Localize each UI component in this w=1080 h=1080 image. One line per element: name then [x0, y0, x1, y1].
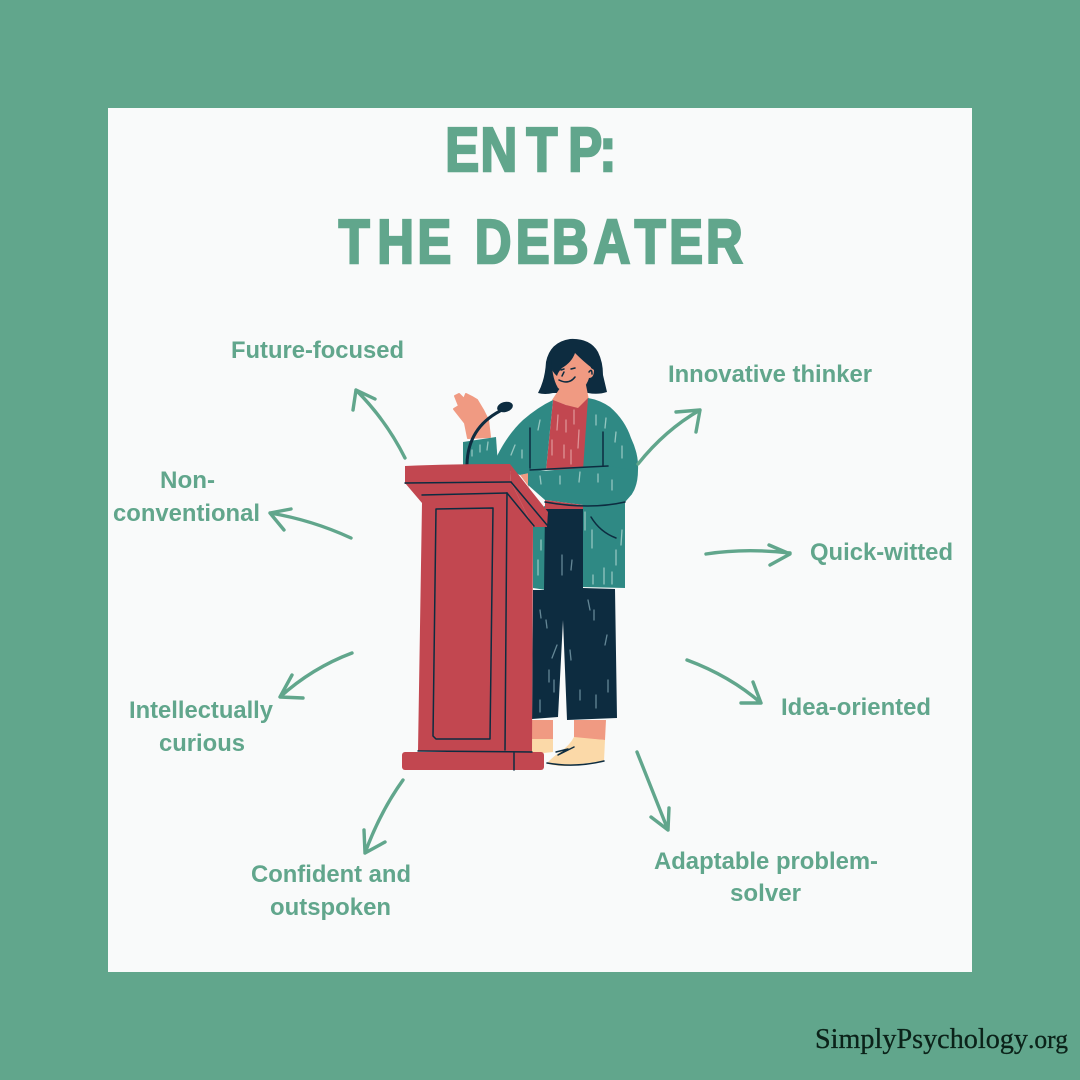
arrow: non-conventional	[270, 509, 351, 538]
label: non-conventional: Non-	[160, 467, 215, 494]
label: future-focused: Future-focused	[231, 337, 404, 364]
arrow: future-focused	[353, 390, 405, 458]
legs	[532, 720, 606, 740]
cardigan lower left	[533, 505, 546, 590]
hair fringe	[551, 345, 594, 376]
face details	[559, 368, 592, 382]
trousers	[532, 509, 617, 720]
cardigan body	[497, 400, 553, 475]
fabric texture	[472, 410, 622, 712]
arrow: quick-witted	[706, 545, 790, 565]
lower shirt	[545, 500, 583, 510]
label: non-conventional: conventional	[113, 500, 260, 527]
arrow: intellectually curious	[280, 653, 352, 698]
title: THE DEBATER	[339, 208, 743, 277]
neck and face	[552, 352, 594, 410]
podium lines	[405, 482, 547, 770]
hair back	[538, 339, 607, 394]
label: intellectually curious: Intellectually	[129, 697, 274, 724]
shoe lines	[547, 747, 604, 765]
label: adaptable problem-solver	[654, 848, 878, 907]
title	[339, 116, 743, 277]
hand	[454, 394, 490, 438]
arrow: confident and outspoken	[364, 780, 403, 853]
label: confident and outspoken	[251, 861, 411, 921]
logo: SimplyPsychology.org: SimplyPsychology	[815, 1023, 1028, 1055]
arrow: idea-oriented	[687, 660, 761, 703]
arrow: innovative thinker	[638, 410, 700, 464]
left sleeve cuff	[463, 437, 498, 466]
label: adaptable problem-solver: solver	[730, 880, 801, 907]
podium top	[405, 464, 511, 484]
label: intellectually curious	[129, 697, 274, 757]
microphone	[467, 400, 514, 464]
arrow: adaptable problem-solver	[637, 752, 669, 830]
figure: woman	[454, 339, 638, 766]
label: quick-witted: Quick-witted	[810, 539, 953, 566]
logo: SimplyPsychology.org: .org	[1028, 1025, 1068, 1054]
podium body	[405, 482, 533, 752]
label: adaptable problem-solver: Adaptable problem-	[654, 848, 878, 875]
cardigan lines	[530, 428, 625, 538]
folded forearm	[528, 466, 632, 505]
skin at wrist	[520, 473, 529, 487]
label: idea-oriented: Idea-oriented	[781, 694, 931, 721]
shirt	[546, 398, 588, 470]
podium base	[402, 752, 544, 770]
podium side slope	[510, 464, 548, 527]
shoes	[532, 737, 605, 766]
label: non-conventional	[113, 467, 260, 527]
label: innovative thinker: Innovative thinker	[668, 361, 872, 388]
label: confident and outspoken: Confident and	[251, 861, 411, 888]
label: intellectually curious: curious	[159, 730, 245, 757]
label: confident and outspoken: outspoken	[270, 894, 391, 921]
title: ENTP:	[445, 116, 616, 185]
panel: white card	[108, 108, 972, 972]
illustration: debater at podium	[402, 339, 638, 770]
podium	[402, 464, 548, 770]
